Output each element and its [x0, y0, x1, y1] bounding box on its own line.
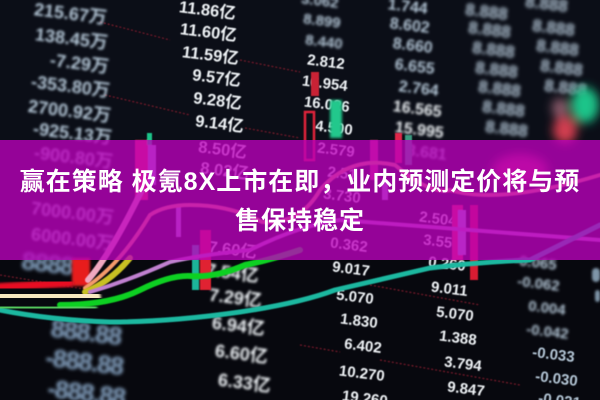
number column 3: 2.812	[306, 52, 346, 73]
number column 3: 10.270	[338, 363, 386, 385]
number column: amount, bottom left: 7.29亿	[208, 285, 263, 311]
number column 5, blurred: 8.888	[481, 97, 526, 121]
number column 4 lower: 5.070	[435, 304, 475, 325]
number column: turnover, top left: 2700.92万	[27, 96, 112, 126]
number column: amount, bottom left: 6.94亿	[211, 313, 266, 339]
number column 3: 2.579	[316, 140, 356, 161]
number column 3: 2.51	[327, 164, 358, 184]
number column 3: 5.070	[335, 287, 375, 308]
number column 3: 6.402	[343, 336, 383, 357]
number column 6, blurred: 8.888	[535, 36, 580, 60]
white and yellow bundle	[0, 295, 95, 297]
magenta title band	[0, 140, 600, 260]
number column 4: 16.565	[392, 98, 443, 121]
number column: turnover, top left: -925.13万	[32, 118, 113, 148]
green bundle	[0, 307, 95, 308]
number column bottom right: -0.033	[531, 344, 576, 366]
number column 4: 15.995	[394, 119, 445, 142]
number column: amount, top centre: 7.60亿	[207, 237, 258, 262]
right edge column, blurred	[592, 268, 600, 302]
number column 3: 4.500	[314, 118, 354, 139]
number column: bottom left, blurred: 888.88	[49, 315, 124, 351]
number column: amount, top centre: 9.28亿	[192, 88, 243, 113]
number column 5, blurred	[464, 0, 529, 141]
red bundle	[0, 283, 70, 287]
number column bottom right: -0.030	[534, 368, 579, 390]
number column 6, blurred: 8.888	[539, 56, 584, 80]
number column: amount, top centre: 11.59亿	[181, 42, 240, 68]
number column 5, blurred: 8.888	[484, 117, 529, 141]
number column: turnover, top left: 6000.00万	[30, 224, 115, 254]
number column bottom right	[513, 252, 582, 400]
number column 6, blurred	[524, 0, 588, 100]
number column 3: 3.730	[322, 186, 362, 207]
number column 5, blurred: 8.888	[464, 0, 509, 24]
number column 3: 1.830	[339, 311, 379, 332]
number column: turnover, top left: -353.80万	[30, 71, 111, 101]
number column 4 lower: 1.388	[438, 328, 478, 349]
number column bottom right: -0.065	[513, 252, 558, 274]
number column 4 lower: 0.260	[427, 254, 467, 275]
number column: amount, top centre: 9.14亿	[194, 111, 245, 136]
number column: amount, bottom left	[205, 260, 272, 396]
number column: amount, top centre: 11.60亿	[179, 19, 238, 45]
number column 3: 16.026	[303, 94, 351, 116]
number column: amount, bottom left: 7.54亿	[205, 260, 260, 286]
number column 4	[387, 0, 448, 164]
title line 2: 售保持稳定	[235, 207, 365, 235]
number column 5, blurred: 8.888	[467, 18, 512, 42]
dotted red guide lines	[0, 22, 520, 385]
number column: turnover, top left	[27, 0, 115, 254]
number column: amount, top centre: 9.57亿	[191, 65, 242, 90]
pale pink rising curve	[88, 190, 142, 280]
green curve	[60, 250, 300, 305]
number column 4 lower: 2.504	[418, 209, 458, 230]
number column 4: 2.764	[398, 78, 440, 100]
number column 4: 3.681	[406, 142, 448, 164]
number column: turnover, top left: 215.67万	[33, 0, 108, 28]
number column bottom right: -0.042	[525, 321, 570, 343]
number column 3: 8.440	[304, 32, 344, 53]
orange curve	[85, 163, 600, 288]
number column 5, blurred: 8.888	[477, 77, 522, 101]
number column: amount, bottom left: 6.60亿	[214, 341, 269, 367]
number column 4 lower: 3.556	[422, 232, 462, 253]
number column 4 lower: 9.011	[430, 279, 469, 300]
number column 4 lower: 9.847	[446, 379, 486, 400]
blurred glow, right edge	[492, 87, 599, 186]
number column: turnover, top left: -900.80万	[33, 142, 114, 172]
number column: turnover, top left: 7000.00万	[30, 198, 115, 228]
number column: bottom left, blurred: 8888	[20, 247, 76, 281]
number column: turnover, top left: -7.29万	[49, 50, 110, 77]
line chart curves	[0, 163, 600, 322]
number column bottom right: -0.062	[516, 273, 561, 295]
number column 4: 8.602	[389, 15, 431, 37]
number column: bottom left, blurred: -888.88	[44, 344, 126, 381]
number column 4: 8.660	[392, 35, 434, 57]
number column: amount, top centre	[178, 0, 258, 262]
title	[20, 168, 580, 235]
number column bottom right: 0.004	[527, 298, 567, 319]
number column 4 lower	[418, 209, 486, 400]
number column: amount, bottom left: 6.33亿	[217, 370, 272, 396]
number column: amount, top centre: 8.50亿	[197, 137, 248, 162]
candlesticks	[72, 72, 478, 290]
teal curve	[0, 225, 600, 322]
number column 3: 8.899	[302, 11, 342, 32]
purple curve	[90, 220, 600, 292]
number column 6, blurred: 8.888	[543, 76, 588, 100]
number column 4 lower: 3.794	[443, 354, 483, 375]
number column 3: 0.362	[329, 235, 369, 256]
number column: turnover, top left: 138.45万	[34, 24, 109, 53]
number column: bottom left, blurred	[20, 247, 128, 400]
number column 3	[300, 0, 389, 400]
number column 6, blurred: 8.888	[531, 16, 576, 40]
number column 3: 9.017	[331, 259, 371, 280]
yellow segment	[85, 258, 130, 292]
number column 4: 6.655	[394, 56, 436, 78]
title line 1: 赢在策略 极氪8X上市在即，业内预测定价将与预	[20, 168, 580, 196]
number column 5, blurred: 8.888	[474, 58, 519, 82]
number column 5, blurred: 8.888	[471, 38, 516, 62]
number column: amount, top centre: 8.02亿	[199, 158, 250, 183]
number column 3: 16.954	[301, 73, 349, 95]
